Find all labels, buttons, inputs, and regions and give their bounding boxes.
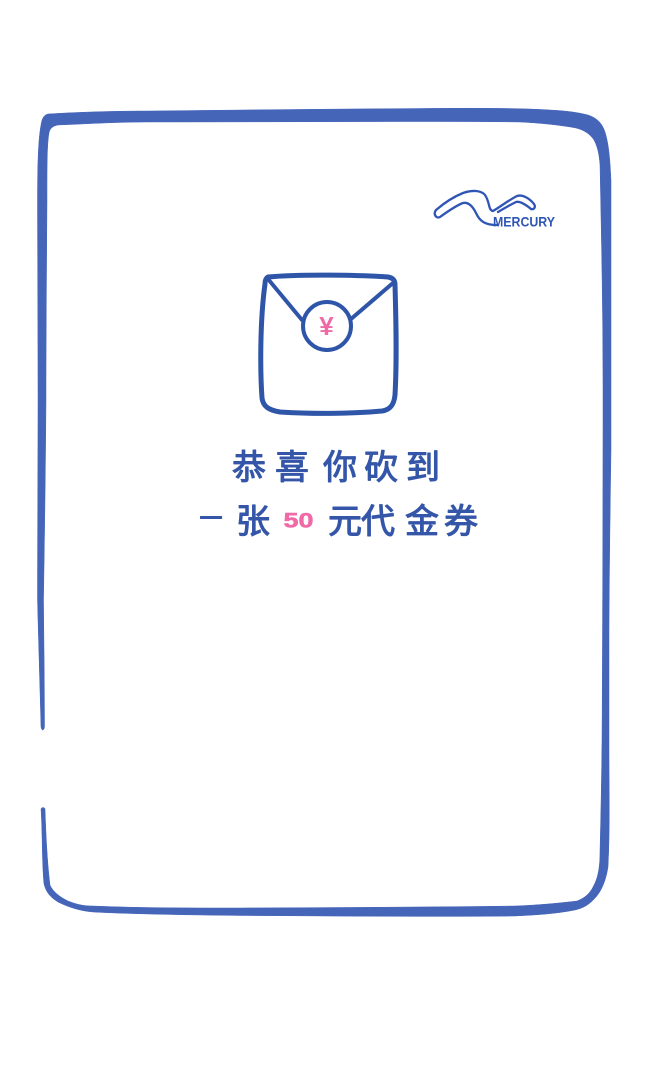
- envelope body: [261, 275, 396, 413]
- icon: envelope: [261, 275, 396, 413]
- heading: line 1: 恭: [232, 449, 266, 487]
- heading: line 1: 砍: [364, 449, 398, 487]
- heading: line 1: 到: [406, 449, 440, 487]
- logo: Mercury: [435, 191, 556, 230]
- heading: line 2: 元: [328, 503, 362, 541]
- hand-drawn blue frame: [38, 108, 611, 916]
- heading: line 1: 你: [323, 449, 357, 487]
- heading: line 2: 代: [361, 503, 395, 541]
- heading: line 1: [232, 449, 440, 487]
- seal with yen sign: ¥: [319, 311, 334, 341]
- heading: line 1: 喜: [275, 449, 309, 487]
- logo wordmark: MERCURY: [493, 214, 556, 230]
- heading: line 2: 一: [200, 505, 222, 531]
- heading: line 2: 金: [405, 503, 439, 541]
- envelope flap: [268, 279, 393, 320]
- heading: line 2: [200, 503, 478, 541]
- heading: line 2: 张: [236, 503, 270, 541]
- heading: line 2: 券: [444, 503, 478, 541]
- pink amount: 50: [284, 510, 314, 532]
